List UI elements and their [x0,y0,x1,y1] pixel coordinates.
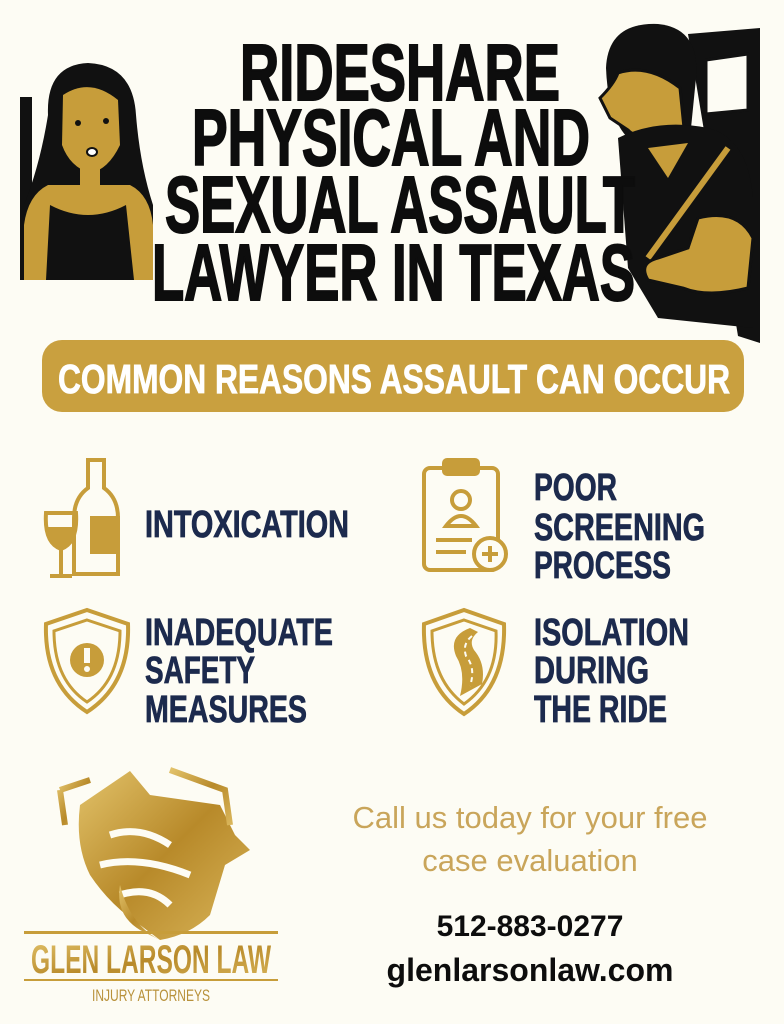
banner: common reasons [42,340,744,412]
item: intoxication [44,458,349,578]
icon: wine bottle and glass [44,458,120,578]
illustration: woman passenger [20,63,153,280]
label [534,612,689,731]
title [152,40,635,310]
label: SAFETY [145,650,255,692]
label: PROCESS [534,545,671,587]
item: inadequate safety measures [44,608,333,731]
label [145,612,333,731]
label: THE RIDE [534,689,667,731]
logo: Glen Larson Law: INJURY ATTORNEYS [92,986,210,1005]
icon: clipboard [422,458,508,572]
label: DURING [534,650,649,692]
callout: free case evaluation: case evaluation [422,843,638,878]
illustration: driver [598,24,760,343]
label [534,467,705,587]
contact: website: glenlarsonlaw.com [387,952,673,988]
callout: free case evaluation [353,800,707,878]
label: POOR [534,467,617,509]
item: poor screening process [422,458,705,587]
contact: phone: 512-883-0277 [437,910,623,943]
icon: shield with road [422,608,506,716]
logo: Glen Larson Law [24,767,278,1005]
callout: free case evaluation: Call us today for your free [353,800,707,835]
icon: shield with exclamation [44,608,130,714]
item: isolation during the ride [422,608,689,731]
